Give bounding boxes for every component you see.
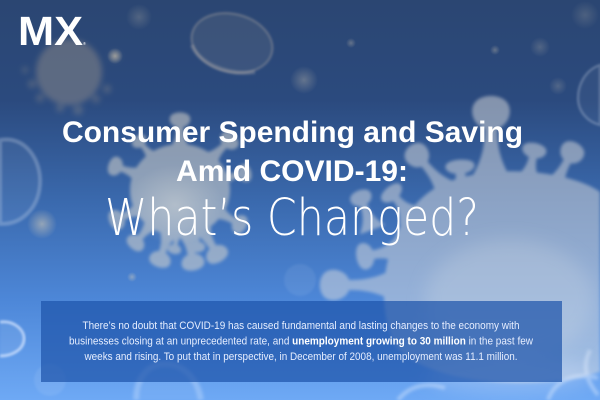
intro paragraph: weeks and rising. To put that in perspective, in December of 2008, unemployment was 11.1 million. — [84, 351, 518, 363]
medium virus, centre — [105, 112, 254, 273]
large virus, right — [320, 96, 600, 383]
medium virus highlight — [127, 165, 223, 245]
intro panel — [41, 301, 562, 382]
ring, lower centre — [136, 364, 201, 400]
blurred virus, top left — [22, 39, 120, 115]
intro paragraph — [69, 320, 533, 363]
blood cell, upper right — [578, 65, 600, 125]
intro paragraph: businesses closing at an unprecedented rate, and unemployment growing to 30 million in the past few — [69, 336, 533, 348]
title — [62, 116, 523, 248]
logo: MX: MX — [18, 8, 83, 54]
logo: MX: ® — [83, 41, 86, 46]
ring, lower left — [0, 322, 24, 356]
blood cell, left — [0, 139, 40, 224]
wispy glow, lower right — [398, 240, 598, 400]
title: Amid COVID-19: — [176, 155, 408, 188]
subtitle: What’s Changed? — [105, 189, 479, 248]
title: Consumer Spending and Saving — [62, 116, 523, 149]
intro paragraph: There’s no doubt that COVID-19 has caused fundamental and lasting changes to the economy with — [82, 320, 520, 332]
red blood cell, top — [185, 5, 279, 81]
